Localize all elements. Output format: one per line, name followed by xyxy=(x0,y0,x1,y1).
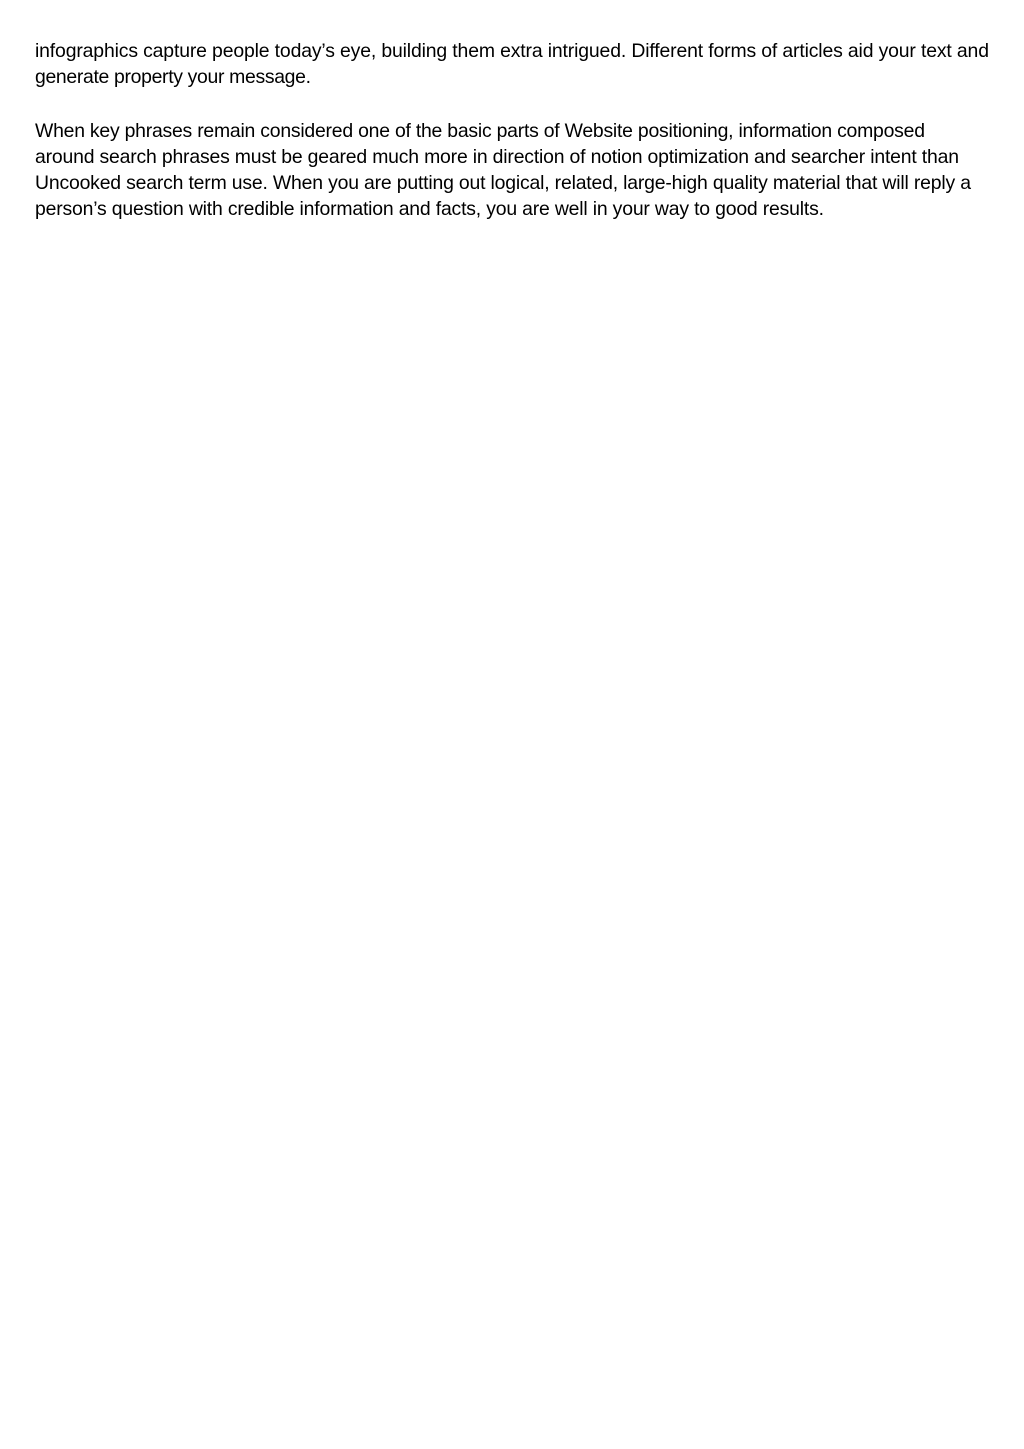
text block: first paragraph xyxy=(35,40,989,88)
text block: second paragraph: Uncooked search term use. When you are putting out logical, related, large-high quality material that will reply a xyxy=(35,172,971,194)
text block: second paragraph: person’s question with credible information and facts, you are well in your way to good results. xyxy=(35,198,824,220)
text block: first paragraph: infographics capture people today’s eye, building them extra intrigued. Different forms of articles aid your text and xyxy=(35,40,989,62)
text block: second paragraph: around search phrases must be geared much more in direction of notion optimization and searcher intent than xyxy=(35,146,959,168)
text block: second paragraph xyxy=(35,120,971,220)
text block: second paragraph: When key phrases remain considered one of the basic parts of Website positioning, information composed xyxy=(35,120,925,142)
text block: first paragraph: generate property your message. xyxy=(35,66,311,88)
